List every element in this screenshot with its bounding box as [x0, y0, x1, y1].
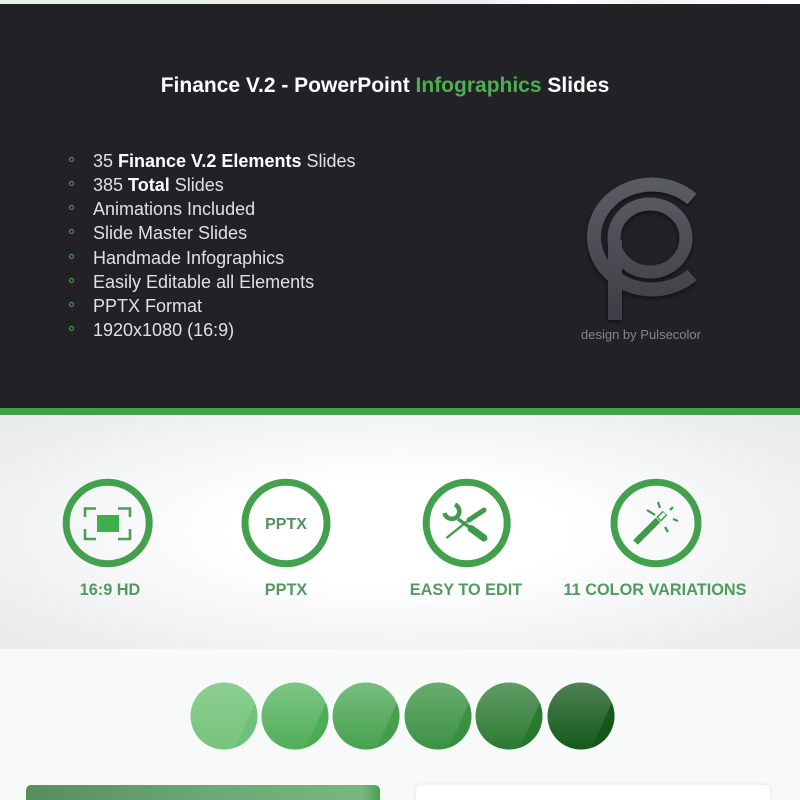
green divider bar	[0, 408, 800, 415]
color swatches	[190, 682, 614, 750]
panel: white card	[416, 785, 770, 800]
panel: dark header	[0, 4, 800, 408]
icon: PPTX	[242, 478, 330, 568]
feature list: 385 Total Slides	[93, 175, 224, 195]
feature list: PPTX Format	[93, 296, 202, 316]
panel: green card	[26, 785, 380, 800]
icon: tools	[422, 478, 511, 568]
label: PPTX: PPTX	[265, 581, 307, 599]
feature list: Easily Editable all Elements	[93, 272, 314, 292]
icon: Pulsecolor logo	[586, 178, 696, 322]
logo caption: design by Pulsecolor	[581, 327, 701, 342]
feature list	[69, 151, 355, 340]
title: Finance V.2 - PowerPoint Infographics Slides	[161, 74, 609, 97]
icon: magic wand	[610, 478, 702, 568]
panel: features band	[0, 415, 800, 649]
label: 16:9 HD: 16:9 HD	[80, 581, 140, 599]
icon: 16:9 HD	[62, 478, 153, 568]
feature list: Handmade Infographics	[93, 248, 284, 268]
feature list: 35 Finance V.2 Elements Slides	[93, 151, 355, 171]
label: easy to edit: EASY TO EDIT	[410, 581, 522, 599]
feature list: Slide Master Slides	[93, 223, 247, 243]
icon: PPTX: PPTX	[265, 516, 307, 533]
feature list: Animations Included	[93, 199, 255, 219]
top strip	[0, 0, 800, 4]
label: 11 color variations: 11 COLOR VARIATIONS	[563, 581, 747, 599]
feature list: 1920x1080 (16:9)	[93, 320, 234, 340]
